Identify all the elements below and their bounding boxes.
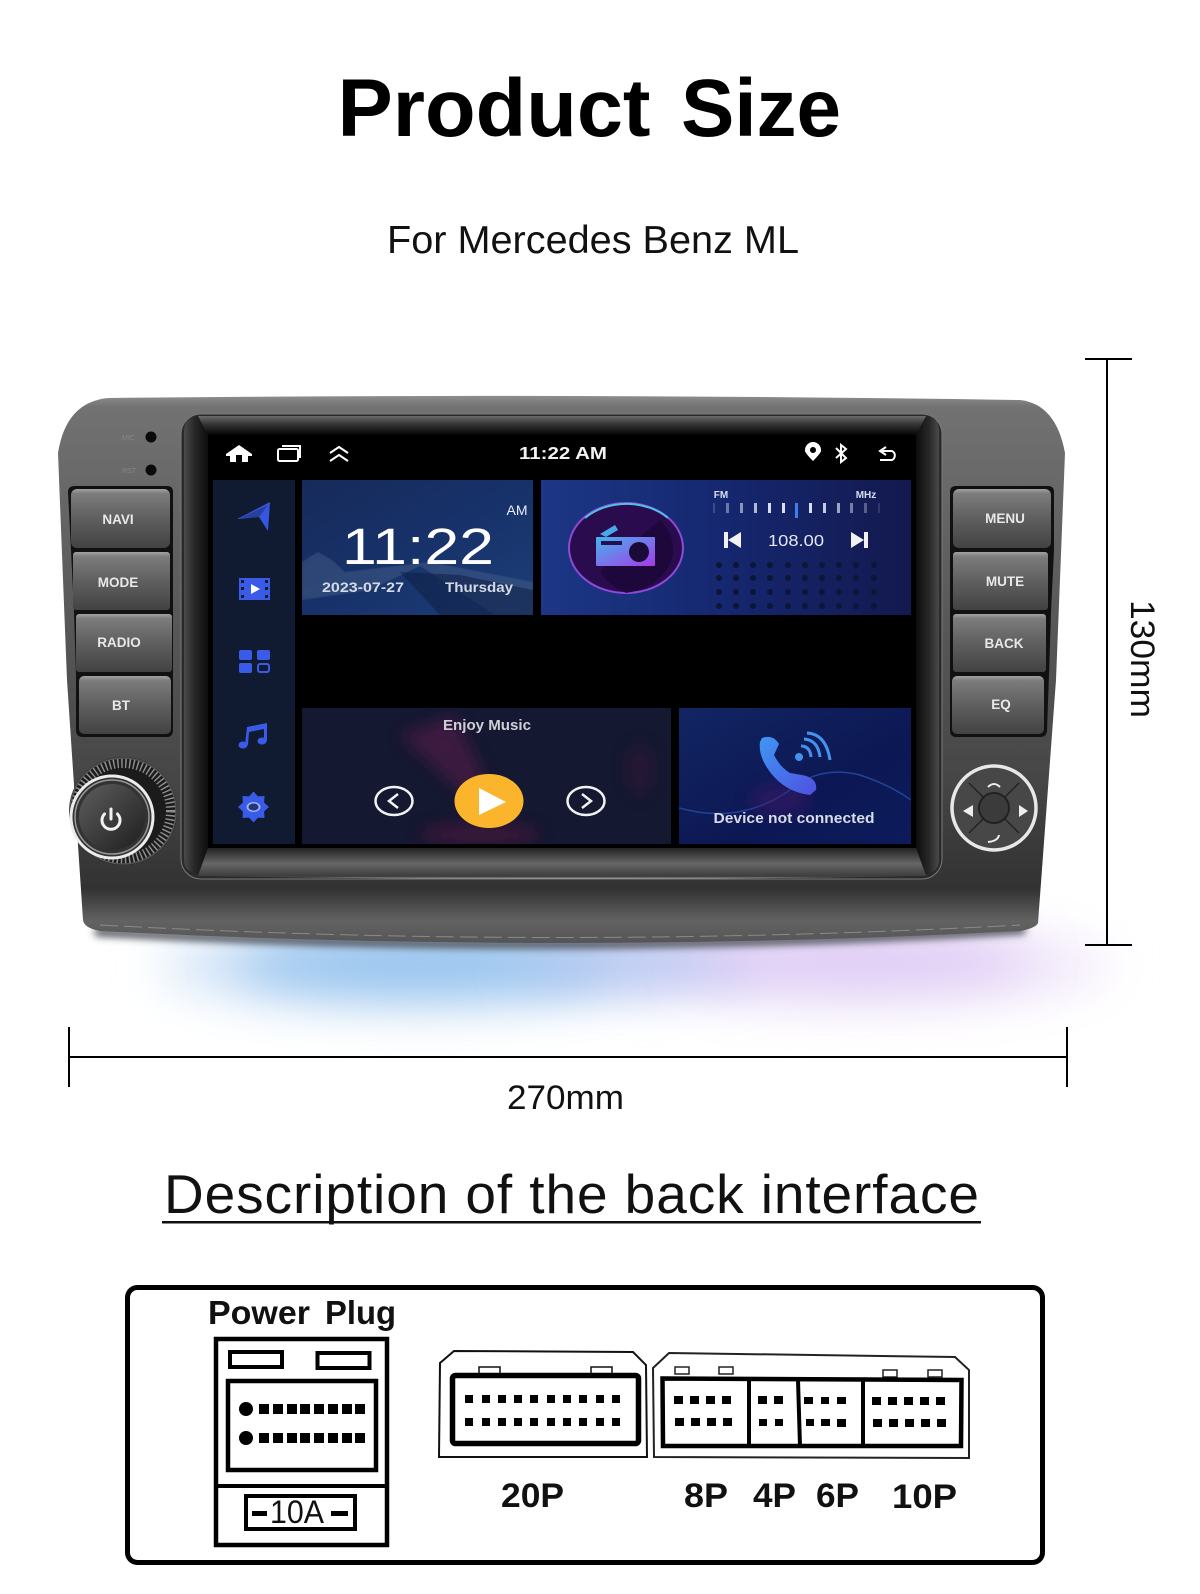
icon: play [454,774,524,828]
device shadow edge [95,930,1025,945]
tuner scale [713,503,880,518]
clock panel: Thursday [445,579,513,595]
right buttons: BACK [984,636,1024,651]
20P connector [439,1351,647,1457]
screen bezel [181,414,942,879]
multi connector [653,1353,969,1458]
height label: 130mm [1123,600,1161,718]
status time: 11:22 AM [519,443,607,463]
right buttons: EQ [991,697,1011,712]
speaker grille [716,562,877,609]
mic and reset holes: MIC [122,435,135,442]
20P label: 20P [501,1477,564,1515]
icon: home [226,445,252,462]
10P label: 10P [892,1478,957,1516]
section heading: Description of the back interface [164,1163,979,1225]
left buttons [68,486,173,737]
title [338,63,841,154]
clock panel [302,480,533,615]
device body [58,396,1065,943]
left buttons: RADIO [97,635,141,650]
icon: radio [569,503,683,593]
icon: previous track [376,787,412,815]
power plug label: Plug [325,1294,396,1331]
power knob [69,757,177,865]
width dimension [69,1027,1067,1117]
power plug connector [216,1339,387,1545]
icon: phone with signal [760,733,830,795]
10A fuse: 10A [270,1494,325,1530]
power plug label: Power [208,1294,310,1331]
panel: back interface [128,1288,1042,1562]
icon: video [239,578,270,600]
screen [208,435,916,848]
width label: 270mm [507,1079,624,1117]
10A fuse [246,1494,355,1530]
icon: music note [238,723,267,748]
under-device light glow [160,924,1110,1008]
icon: chevrons up [330,447,348,461]
right buttons: MENU [985,511,1025,526]
4P label: 4P [753,1477,796,1515]
icon: navigation [237,502,270,531]
clock panel: 2023-07-27 [322,579,404,595]
8P label: 8P [684,1477,728,1515]
car stereo device [58,396,1065,945]
left buttons: BT [112,698,131,713]
title: Size [681,63,841,154]
left buttons: NAVI [102,512,134,527]
phone panel: Device not connected [714,811,874,827]
icon: bluetooth [836,445,846,462]
icon: next [851,532,868,548]
clock panel: AM [506,502,528,518]
phone panel [679,708,911,844]
status bar [226,442,895,463]
clock panel: 11:22 [342,518,494,575]
left buttons: MODE [98,575,138,590]
subtitle: For Mercedes Benz ML [387,219,799,262]
icon: previous [724,532,741,548]
icon: location [805,442,821,461]
radio panel: FM [714,490,728,501]
music panel: Enjoy Music [443,717,531,734]
sidebar [213,480,295,844]
title: Product [338,63,650,154]
radio panel: MHz [856,490,876,501]
icon: next track [568,787,604,815]
right buttons: MUTE [986,574,1024,589]
6P label: 6P [816,1477,859,1515]
radio panel [541,480,911,615]
icon: back [880,447,895,460]
mic and reset holes [122,432,156,476]
icon: settings gear [238,792,269,822]
height dimension [1085,359,1161,945]
power plug label [208,1294,396,1331]
mic and reset holes: RST [122,468,137,475]
d-pad control [952,766,1036,850]
right buttons [950,486,1054,737]
icon: apps grid [239,650,270,673]
radio panel: 108.00 [768,533,824,550]
icon: recent apps [278,446,300,461]
music panel [302,708,671,847]
